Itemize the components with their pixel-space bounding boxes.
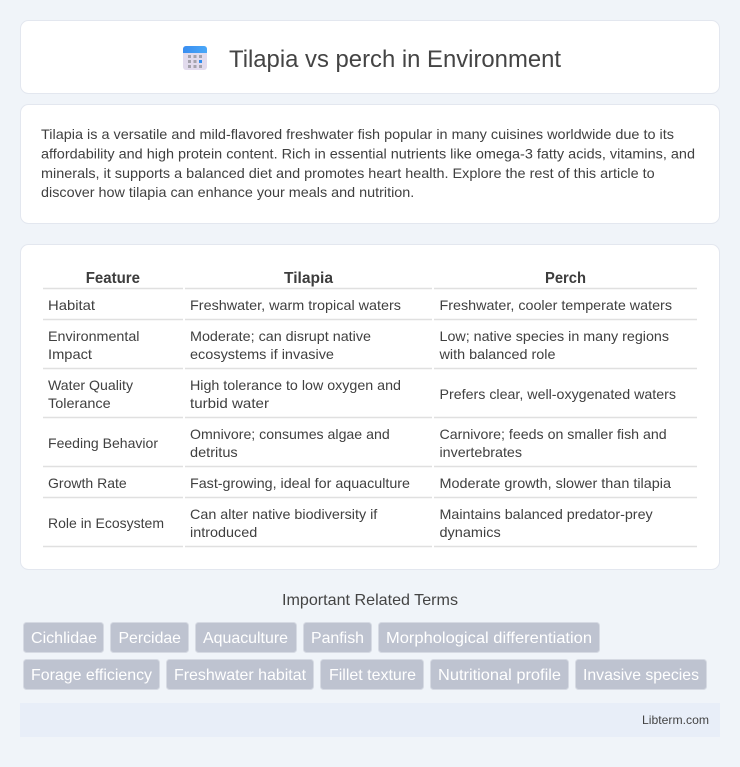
row: growth rate: Growth Rate	[48, 475, 127, 491]
tags: related terms: Fillet texture	[329, 667, 416, 684]
row: water quality tolerance: Water Quality	[48, 377, 133, 393]
table header: Perch	[545, 270, 586, 287]
tags: related terms: Forage efficiency	[31, 667, 152, 684]
table header: Tilapia	[284, 270, 333, 287]
row: role in ecosystem: introduced	[190, 524, 257, 540]
tags: related terms: Invasive species	[583, 667, 699, 684]
icon: calendar	[183, 46, 207, 70]
panel: title card	[20, 20, 720, 94]
row: role in ecosystem: Role in Ecosystem	[48, 515, 164, 531]
panel: intro paragraph	[20, 104, 720, 224]
row: feeding behavior: Feeding Behavior	[48, 435, 158, 451]
row: water quality tolerance: Prefers clear, well-oxygenated waters	[440, 386, 676, 402]
table header	[86, 270, 586, 287]
text block: intro: minerals, it supports a balanced diet and promotes heart health. Explore the rest of this article to	[41, 165, 655, 181]
row: role in ecosystem: dynamics	[440, 524, 501, 540]
heading: related terms: Important Related Terms	[282, 592, 458, 609]
row: environmental impact: ecosystems if invasive	[190, 346, 334, 362]
row: environmental impact: Moderate; can disrupt native	[190, 328, 371, 344]
row: water quality tolerance: Tolerance	[48, 395, 111, 411]
row: role in ecosystem: Can alter native biodiversity if	[190, 506, 377, 522]
row: habitat: Freshwater, warm tropical waters	[190, 297, 401, 313]
row: role in ecosystem: Maintains balanced predator-prey	[440, 506, 653, 522]
tags: related terms	[24, 622, 706, 690]
row: feeding behavior: Omnivore; consumes algae and	[190, 426, 390, 442]
row: habitat: Habitat	[48, 297, 95, 313]
row: environmental impact: Low; native species in many regions	[440, 328, 669, 344]
row: environmental impact: Environmental	[48, 328, 140, 344]
text block: intro	[41, 126, 695, 200]
row: habitat	[48, 297, 672, 313]
row: feeding behavior	[48, 426, 667, 460]
table header: Feature	[86, 270, 140, 287]
row: growth rate: Moderate growth, slower than tilapia	[440, 475, 671, 491]
row: water quality tolerance: turbid water	[190, 395, 269, 411]
row: habitat: Freshwater, cooler temperate waters	[440, 297, 672, 313]
row: feeding behavior: invertebrates	[440, 444, 522, 460]
row: environmental impact: Impact	[48, 346, 92, 362]
text block: intro: Tilapia is a versatile and mild-flavored freshwater fish popular in many cuisines worldwide due to its	[41, 126, 674, 142]
tags: related terms: Percidae	[118, 630, 181, 647]
row: environmental impact	[48, 328, 669, 362]
text block: intro: affordability and high protein content. Rich in essential nutrients like omega-3 fatty acids, vitamins, and	[41, 146, 695, 162]
tags: related terms: Aquaculture	[203, 630, 288, 647]
title: Tilapia vs perch in Environment	[229, 46, 561, 73]
tags: related terms: Freshwater habitat	[174, 667, 307, 684]
footer	[20, 703, 720, 737]
panel: comparison table	[20, 244, 720, 570]
row: environmental impact: with balanced role	[438, 346, 556, 362]
row: growth rate	[48, 475, 671, 491]
row: role in ecosystem	[48, 506, 653, 540]
row: feeding behavior: detritus	[190, 444, 238, 460]
footer: Libterm.com	[642, 713, 709, 727]
row: water quality tolerance	[48, 377, 676, 411]
row: water quality tolerance: High tolerance to low oxygen and	[190, 377, 401, 393]
tags: related terms: Nutritional profile	[438, 667, 561, 684]
tags: related terms: Panfish	[311, 630, 364, 647]
tags: related terms: Cichlidae	[31, 630, 97, 647]
row: growth rate: Fast-growing, ideal for aquaculture	[190, 475, 410, 491]
row: feeding behavior: Carnivore; feeds on smaller fish and	[440, 426, 667, 442]
tags: related terms: Morphological differentiation	[386, 630, 592, 647]
text block: intro: discover how tilapia can enhance your meals and nutrition.	[41, 184, 414, 200]
